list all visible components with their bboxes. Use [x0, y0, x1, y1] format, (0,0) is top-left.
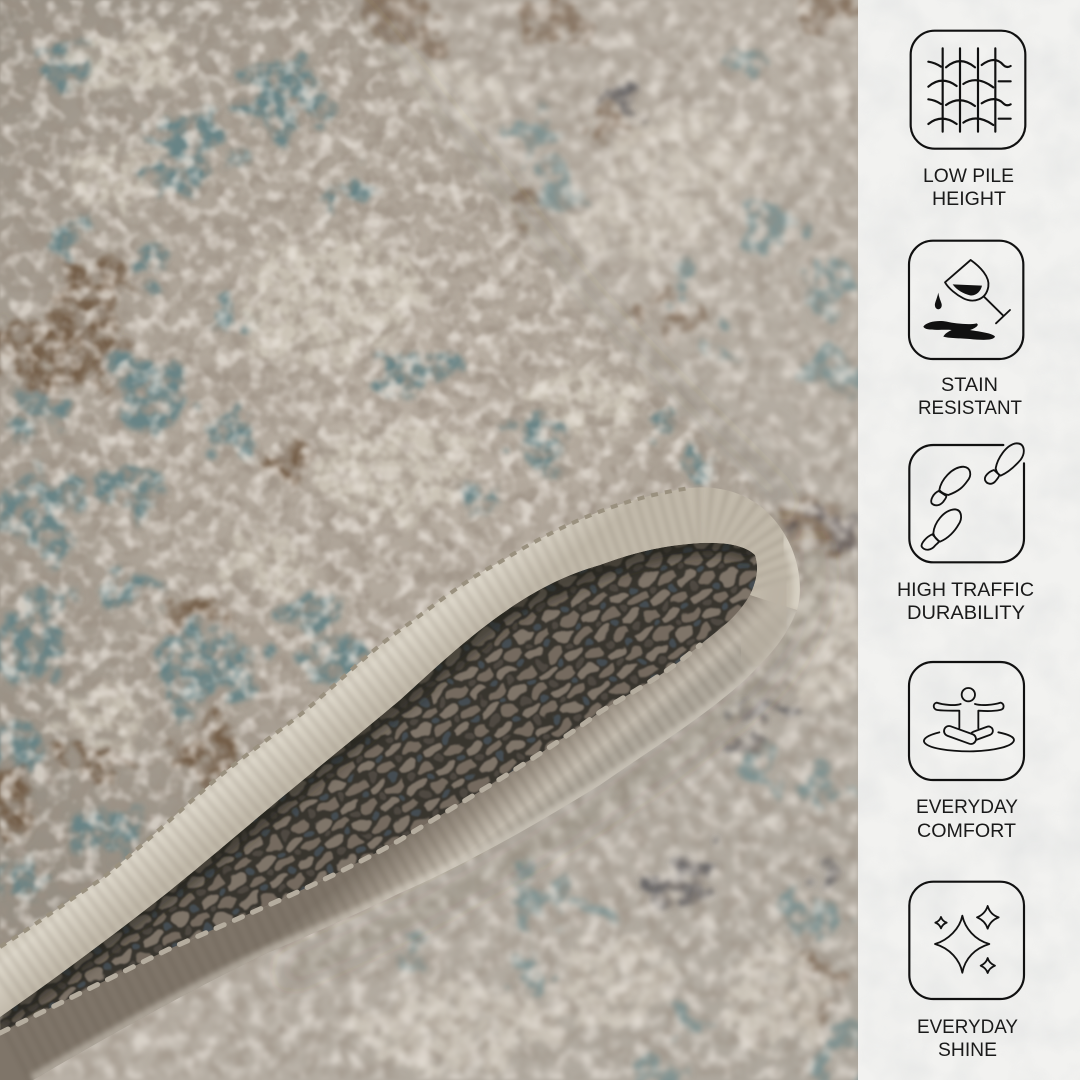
- label: everyday shine: SHINE: [938, 1040, 997, 1061]
- label: everyday shine: [917, 1017, 1018, 1061]
- texture: floor pile speckle: [0, 0, 858, 1080]
- rug binding: lower edge: [0, 560, 820, 1080]
- label: high traffic durability: HIGH TRAFFIC: [897, 580, 1034, 601]
- icon: spilled wine glass: [909, 241, 1023, 359]
- texture: roll pile speckle: [0, 0, 803, 936]
- label: everyday comfort: [916, 797, 1018, 842]
- feature: high traffic durability: [897, 443, 1034, 624]
- label: everyday shine: EVERYDAY: [917, 1017, 1018, 1038]
- label: stain resistant: [918, 375, 1022, 419]
- label: low pile height: [923, 166, 1014, 210]
- feature: everyday comfort: [909, 662, 1024, 842]
- panel background: [858, 0, 1080, 1080]
- feature: low pile height: [911, 31, 1025, 210]
- feature: stain resistant: [909, 241, 1023, 419]
- label: high traffic durability: DURABILITY: [907, 603, 1025, 624]
- label: high traffic durability: [897, 580, 1034, 624]
- icon: seated figure: [909, 662, 1024, 780]
- label: stain resistant: RESISTANT: [918, 398, 1022, 419]
- label: low pile height: HEIGHT: [932, 189, 1006, 210]
- panel: features: [858, 0, 1080, 1080]
- label: low pile height: LOW PILE: [923, 166, 1014, 187]
- icon: sparkles: [909, 882, 1024, 999]
- rug binding: upper edge: [0, 470, 820, 1033]
- feature: everyday shine: [909, 882, 1024, 1061]
- rug backing weave: [0, 542, 757, 1030]
- label: everyday comfort: COMFORT: [917, 821, 1016, 842]
- photo: rolled rug top surface: [0, 0, 806, 1030]
- icon: footprints: [909, 443, 1024, 562]
- icon: pile fibres: [911, 31, 1025, 149]
- shadow: roll and fold on floor: [280, 0, 815, 975]
- label: everyday comfort: EVERYDAY: [916, 797, 1018, 818]
- label: stain resistant: STAIN: [941, 375, 998, 396]
